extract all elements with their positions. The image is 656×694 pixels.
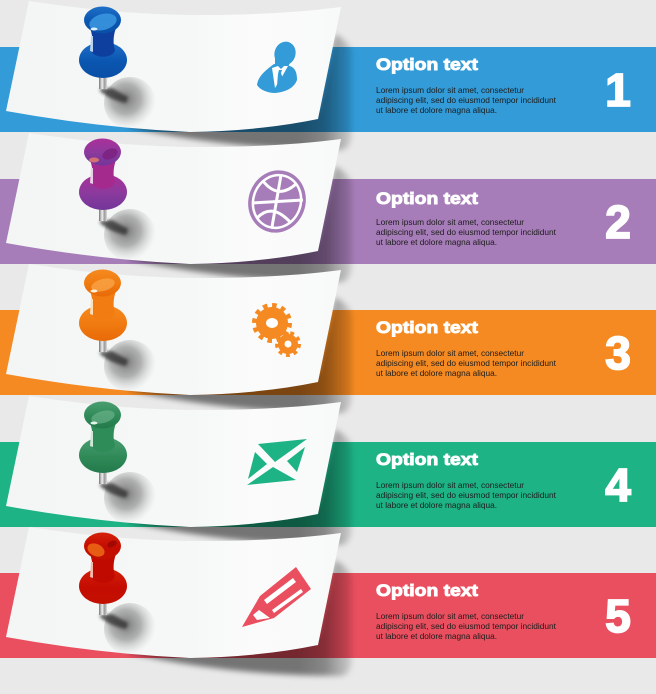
body 1: adipiscing elit, sed do eiusmod tempor incididunt (376, 95, 557, 105)
heading 2: Option text (376, 189, 478, 208)
band 3 orange (0, 310, 656, 395)
body 1: Lorem ipsum dolor sit amet, consectetur (376, 85, 524, 95)
option 2 text (376, 189, 631, 248)
option 4 text (376, 450, 631, 511)
band 4 green (0, 442, 656, 527)
band 5 red (0, 573, 656, 658)
number 2: 2 (605, 196, 631, 248)
number 1: 1 (605, 64, 631, 116)
icon: person (257, 39, 299, 93)
number 4: 4 (605, 459, 631, 511)
body 5 (376, 611, 557, 641)
body 2: adipiscing elit, sed do eiusmod tempor incididunt (376, 227, 557, 237)
body 3: ut labore et dolore magna aliqua. (376, 368, 497, 378)
body 2: Lorem ipsum dolor sit amet, consectetur (376, 217, 524, 227)
heading 5: Option text (376, 581, 478, 600)
body 5: Lorem ipsum dolor sit amet, consectetur (376, 611, 524, 621)
body 3 (376, 348, 557, 378)
heading 4: Option text (376, 450, 478, 469)
pin: green (79, 402, 156, 524)
note card 5 with pin and pencil icon (6, 527, 352, 676)
body 3: Lorem ipsum dolor sit amet, consectetur (376, 348, 524, 358)
pin: blue (79, 6, 156, 129)
body 1: ut labore et dolore magna aliqua. (376, 105, 497, 115)
note card 2 with pin and globe icon (6, 133, 352, 282)
icon: gears (254, 306, 299, 355)
body 4: adipiscing elit, sed do eiusmod tempor incididunt (376, 490, 557, 500)
body 5: adipiscing elit, sed do eiusmod tempor incididunt (376, 621, 557, 631)
option 3 text (376, 318, 631, 379)
note card 1 with pin and person icon (6, 1, 352, 150)
icon: envelope (247, 439, 307, 485)
note card 4 with pin and envelope icon (6, 396, 352, 545)
body 2: ut labore et dolore magna aliqua. (376, 237, 497, 247)
body 4 (376, 480, 557, 510)
number 5: 5 (605, 590, 631, 642)
heading 1: Option text (376, 55, 478, 74)
pin: orange (79, 270, 156, 392)
band 1 blue (0, 47, 656, 132)
icon: globe (239, 162, 315, 241)
option 5 text (376, 581, 631, 642)
body 4: ut labore et dolore magna aliqua. (376, 500, 497, 510)
heading 3: Option text (376, 318, 478, 337)
body 4: Lorem ipsum dolor sit amet, consectetur (376, 480, 524, 490)
pin: red (79, 532, 156, 655)
pin: purple (79, 138, 156, 261)
body 2 (376, 217, 557, 247)
note card 3 with pin and gears icon (6, 264, 352, 413)
body 5: ut labore et dolore magna aliqua. (376, 631, 497, 641)
body 1 (376, 85, 557, 115)
band 2 purple (0, 179, 656, 264)
number 3: 3 (605, 327, 631, 379)
body 3: adipiscing elit, sed do eiusmod tempor incididunt (376, 358, 557, 368)
icon: pencil (242, 567, 311, 627)
option 1 text (376, 55, 631, 116)
